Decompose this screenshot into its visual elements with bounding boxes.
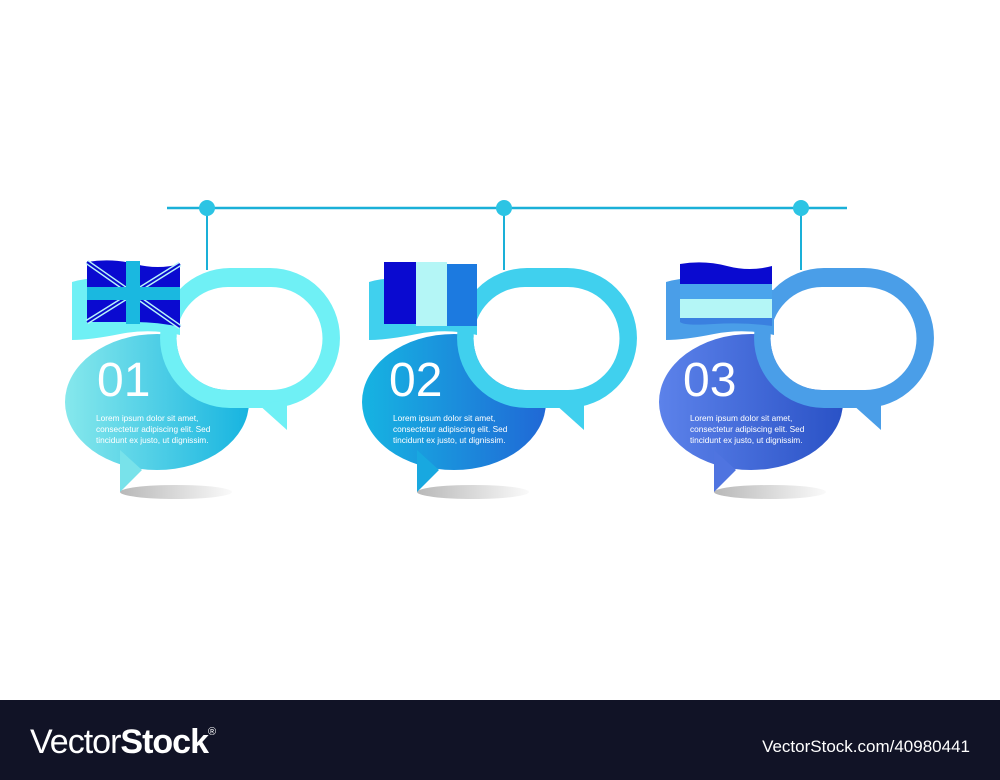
text block: tincidunt ex justo, ut dignissim. [96,435,209,445]
shadow [714,485,826,499]
text block: tincidunt ex justo, ut dignissim. [690,435,803,445]
footer url: VectorStock.com/40980441 [762,737,970,756]
text block: consectetur adipiscing elit. Sed [393,424,508,434]
text block: tincidunt ex justo, ut dignissim. [393,435,506,445]
text block: consectetur adipiscing elit. Sed [96,424,211,434]
number: 03 [683,354,736,407]
main bubble [659,334,843,492]
ring bubble [754,268,934,430]
number: 01 [97,354,150,407]
panel: step 03 [659,262,934,499]
text block: Lorem ipsum dolor sit amet, [96,413,198,423]
panel: step 02 [362,262,637,499]
panel: step 01 [65,260,340,499]
main bubble [362,334,546,492]
shadow [120,485,232,499]
shadow [417,485,529,499]
text block: Lorem ipsum dolor sit amet, [393,413,495,423]
footer logo: VectorStock [30,723,208,761]
ring bubble [457,268,637,430]
main bubble [65,334,249,492]
number: 02 [389,354,442,407]
text block: Lorem ipsum dolor sit amet, [690,413,792,423]
flag: France [369,262,477,340]
footer logo: ® [208,726,216,738]
flag: striped [666,262,774,340]
flag: UK [72,260,180,340]
ring bubble [160,268,340,430]
text block: consectetur adipiscing elit. Sed [690,424,805,434]
connector line [167,200,847,270]
footer bar [0,700,1000,780]
